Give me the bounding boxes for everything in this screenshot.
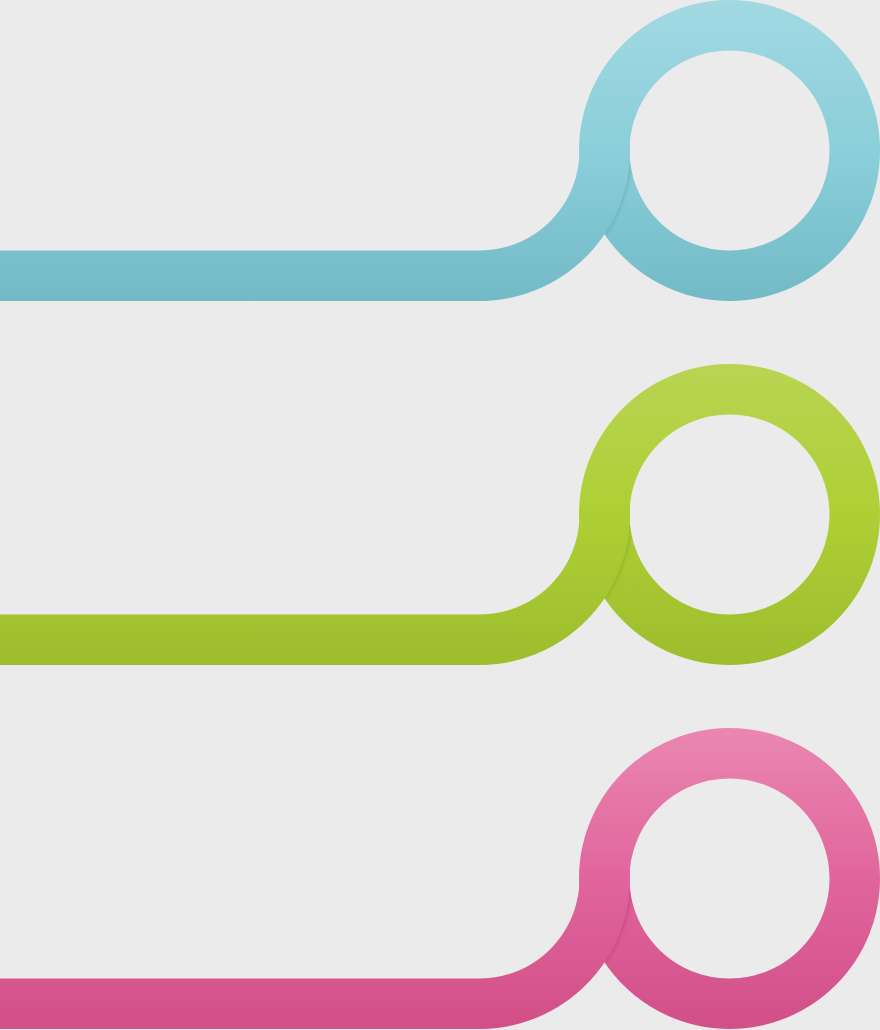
panel: blue ribbon loop bbox=[0, 25, 855, 276]
pink fold shadow bbox=[604, 878, 630, 962]
pink ring bbox=[604, 753, 855, 1004]
pink tail bbox=[0, 868, 605, 1004]
green ring bbox=[604, 389, 855, 640]
green tail bbox=[0, 504, 605, 640]
blue fold shadow bbox=[604, 150, 630, 234]
panel: pink ribbon loop bbox=[0, 753, 855, 1004]
panel: green ribbon loop bbox=[0, 389, 855, 640]
green fold shadow bbox=[604, 514, 630, 598]
blue tail bbox=[0, 140, 605, 276]
blue ring bbox=[604, 25, 855, 276]
